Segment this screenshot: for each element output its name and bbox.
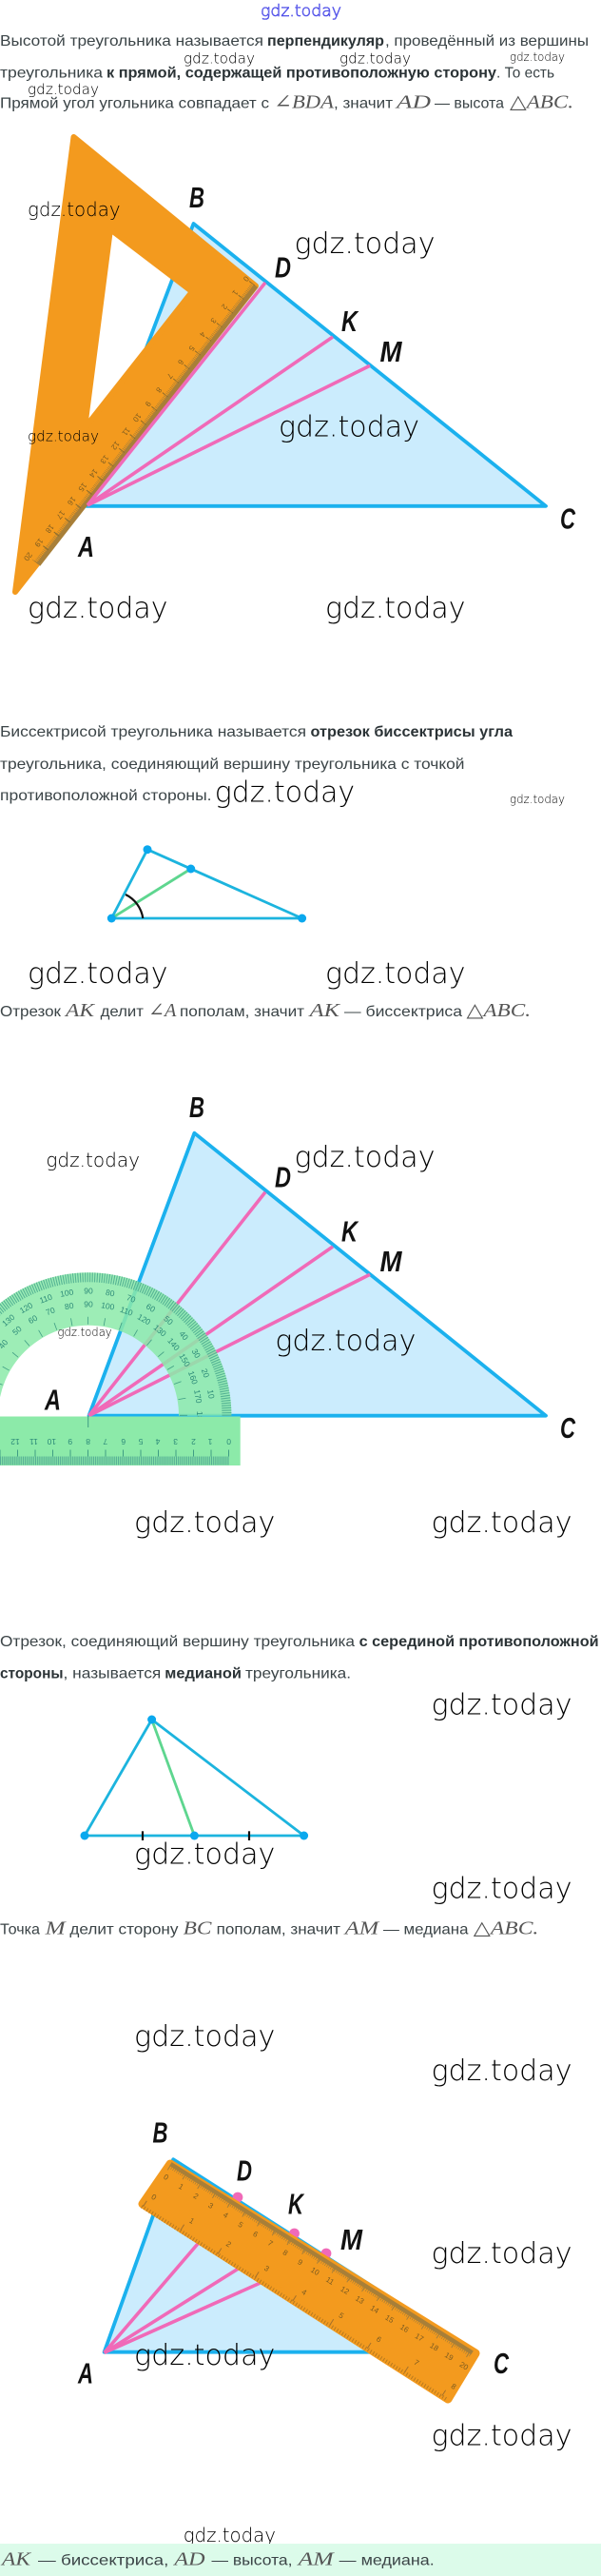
set square numbers: 6 — [176, 358, 185, 366]
set square numbers: 16 — [66, 495, 78, 507]
set square numbers: 1 — [230, 288, 240, 298]
protractor numbers: 40 — [177, 1329, 190, 1343]
ruler inch numbers — [149, 2193, 458, 2391]
set square ruler scale — [35, 283, 256, 564]
text block: median definition: стороны — [0, 1665, 63, 1681]
set square numbers: 3 — [208, 316, 218, 325]
protractor numbers: 110 — [38, 1291, 54, 1306]
watermark: gdz.today — [432, 1872, 572, 1905]
ruler inch numbers: 1 — [187, 2216, 196, 2226]
ruler centimetre numbers: 1 — [177, 2182, 185, 2192]
diagram: triangle with set square — [15, 137, 575, 592]
base ruler numbers: 1 — [207, 1437, 212, 1446]
watermark: gdz.today — [510, 50, 565, 64]
ruler inch numbers: 5 — [338, 2311, 346, 2321]
protractor numbers: 120 — [18, 1300, 34, 1315]
vertex labels: K — [288, 2187, 305, 2221]
watermark: gdz.today — [28, 592, 167, 625]
watermark: gdz.today — [432, 1689, 572, 1722]
protractor numbers: 100 — [100, 1300, 115, 1312]
protractor numbers: 70 — [126, 1292, 137, 1305]
watermark: gdz.today — [432, 2420, 572, 2453]
protractor numbers: 110 — [119, 1305, 134, 1318]
text block: median definition: Отрезок, соединяющий вершину треугольника — [0, 1634, 355, 1650]
ruler centimetre numbers: 11 — [324, 2275, 336, 2287]
ruler inch numbers: 8 — [450, 2382, 458, 2391]
vertex labels: B — [152, 2116, 167, 2149]
base ruler numbers: 5 — [138, 1437, 143, 1446]
vertex labels: C — [560, 502, 575, 535]
vertex labels: C — [560, 1411, 575, 1445]
text block: altitude definition: — высота — [435, 95, 504, 111]
bisector — [111, 869, 191, 918]
protractor numbers — [0, 1287, 217, 1425]
watermark: gdz.today — [295, 227, 436, 261]
watermark: gdz.today — [325, 592, 466, 625]
text block: median definition: медианой — [165, 1665, 242, 1681]
text block: AK is bisector — [0, 1000, 531, 1021]
vertex labels: C — [494, 2347, 509, 2380]
protractor numbers: 100 — [59, 1287, 74, 1299]
triangle sides — [111, 850, 302, 918]
watermark: gdz.today — [184, 50, 255, 68]
text block: median definition: треугольника. — [245, 1665, 351, 1681]
text block: bisector definition: отрезок биссектрисы угла — [310, 724, 513, 740]
base ruler numbers: 12 — [10, 1437, 20, 1446]
base ruler numbers — [10, 1437, 231, 1446]
text block: altitude definition: △ABC. — [510, 91, 573, 112]
vertex labels — [77, 2116, 509, 2390]
set square numbers: 19 — [32, 537, 45, 549]
ruler inch numbers: 7 — [413, 2358, 421, 2368]
set square numbers: 17 — [54, 509, 67, 521]
base ruler numbers: 3 — [173, 1437, 178, 1446]
vertex labels: K — [341, 305, 359, 338]
watermark: gdz.today — [279, 411, 419, 444]
set square numbers — [22, 274, 251, 562]
ruler centimetre numbers: 15 — [383, 2313, 396, 2325]
protractor numbers: 170 — [192, 1389, 204, 1404]
set square numbers: 5 — [186, 344, 196, 353]
watermark: gdz.today — [134, 1506, 275, 1540]
text block: AK is bisector: Отрезок — [0, 1004, 62, 1020]
ruler centimetre numbers: 10 — [309, 2266, 321, 2277]
protractor numbers: 80 — [64, 1301, 74, 1311]
watermark: gdz.today — [28, 428, 99, 445]
set square numbers: 4 — [198, 330, 207, 339]
conclusion text: AM — [296, 2548, 335, 2569]
protractor numbers: 70 — [45, 1305, 56, 1317]
text block: altitude definition: треугольника — [0, 66, 103, 82]
text block: altitude definition: ∠BDA — [274, 91, 335, 112]
set square numbers: 9 — [143, 400, 152, 408]
ruler centimetre numbers: 20 — [458, 2360, 470, 2372]
protractor numbers: 20 — [200, 1367, 212, 1379]
ruler centimetre numbers: 7 — [266, 2238, 275, 2249]
pink points D, K, M — [233, 2193, 331, 2258]
protractor numbers: 30 — [190, 1347, 203, 1360]
text block: AM is median: △ABC. — [474, 1918, 538, 1939]
set square numbers: 7 — [165, 372, 174, 381]
text block: AK is bisector: — биссектриса — [344, 1004, 462, 1020]
conclusion text: — медиана. — [339, 2552, 435, 2568]
text block: bisector definition: Биссектрисой треугольника называется — [0, 724, 306, 740]
pink segments AD, AK, AM — [89, 1192, 370, 1416]
base ruler numbers: 6 — [121, 1437, 126, 1446]
text block: altitude definition: к прямой, содержащей противоположную сторону — [107, 66, 496, 82]
conclusion text: — высота, — [211, 2552, 293, 2568]
vertex labels: B — [189, 181, 204, 214]
conclusion text: AK — [0, 2548, 32, 2569]
ruler inch numbers: 6 — [375, 2334, 383, 2345]
ruler inch numbers: 3 — [262, 2264, 271, 2273]
vertices — [107, 845, 306, 923]
text block: AK is bisector: ∠A — [148, 1000, 177, 1021]
watermark: gdz.today — [134, 2339, 275, 2372]
vertex labels — [77, 181, 575, 563]
protractor numbers: 140 — [165, 1336, 182, 1352]
set square numbers: 2 — [220, 303, 229, 311]
ruler centimetre numbers: 12 — [339, 2285, 351, 2296]
watermark: gdz.today — [28, 957, 167, 991]
ruler centimetre numbers: 9 — [296, 2257, 304, 2268]
protractor numbers: 90 — [84, 1287, 93, 1296]
triangle ABC — [87, 224, 546, 506]
text block: AM is median: AM — [342, 1918, 380, 1939]
ruler centimetre numbers: 0 — [162, 2173, 170, 2182]
conclusion text: — биссектриса, — [38, 2552, 168, 2568]
ruler centimetre numbers: 14 — [369, 2304, 380, 2315]
text block: median definition: с серединой противоположной — [359, 1634, 599, 1650]
protractor numbers: 150 — [177, 1352, 192, 1368]
text block: altitude definition: , проведённый из вершины — [385, 33, 589, 49]
set square numbers: 8 — [154, 385, 164, 395]
watermark: gdz.today — [184, 2524, 276, 2547]
equal-segment ticks — [143, 1831, 249, 1840]
median — [152, 1720, 194, 1836]
ruler centimetre numbers: 6 — [251, 2230, 260, 2239]
set square numbers: 18 — [44, 522, 56, 535]
text block: AK is bisector: △ABC. — [466, 1000, 531, 1021]
text block: AM is median — [0, 1918, 538, 1939]
vertex labels: D — [275, 1161, 291, 1193]
watermark: gdz.today — [28, 81, 99, 98]
vertex labels: A — [77, 530, 94, 563]
diagram: triangle with bisector — [107, 845, 306, 923]
vertex labels: A — [77, 2356, 93, 2390]
base ruler numbers: 10 — [47, 1437, 56, 1446]
watermark: gdz.today — [57, 1326, 112, 1339]
text block: altitude definition: . То есть — [496, 66, 554, 82]
ruler centimetre numbers: 4 — [222, 2211, 230, 2220]
ruler centimetre numbers: 13 — [354, 2294, 366, 2306]
vertex labels: M — [380, 1245, 403, 1278]
ruler inch numbers: 0 — [149, 2193, 158, 2202]
text block: AK is bisector: пополам, значит — [180, 1004, 305, 1020]
base ruler numbers: 11 — [29, 1437, 38, 1446]
ruler centimetre numbers: 5 — [237, 2220, 245, 2230]
watermark: gdz.today — [134, 1838, 275, 1871]
diagram: triangle with protractor — [0, 1091, 575, 1465]
text block: AK is bisector: AK — [307, 1000, 341, 1021]
base ruler ticks — [0, 1416, 229, 1461]
protractor numbers: 50 — [10, 1324, 24, 1337]
ruler centimetre numbers: 8 — [281, 2248, 290, 2258]
base ruler numbers: 9 — [68, 1437, 72, 1446]
base ruler numbers: 2 — [191, 1437, 196, 1446]
watermark: gdz.today — [275, 1325, 416, 1358]
text block: altitude definition — [0, 33, 589, 112]
vertex labels: K — [341, 1214, 359, 1249]
conclusion text — [0, 2548, 435, 2569]
protractor numbers: 120 — [136, 1312, 152, 1327]
vertex labels: D — [237, 2154, 252, 2187]
protractor numbers: 50 — [162, 1314, 175, 1327]
set square numbers: 11 — [120, 425, 132, 438]
text block: bisector definition — [0, 724, 513, 804]
diagram: triangle with ruler — [77, 2116, 509, 2399]
ruler centimetre numbers: 19 — [443, 2350, 456, 2363]
triangle ABC — [89, 1133, 546, 1416]
watermark: gdz.today — [325, 957, 466, 991]
conclusion band — [0, 2544, 601, 2576]
set square — [15, 137, 256, 592]
vertex labels: A — [44, 1384, 61, 1416]
base ruler numbers: 8 — [86, 1437, 90, 1446]
base ruler numbers: 7 — [103, 1437, 107, 1446]
text block: AM is median: — медиана — [383, 1922, 469, 1938]
band background — [0, 2544, 601, 2576]
set square numbers: 10 — [130, 412, 143, 424]
text block: altitude definition: Высотой треугольника называется — [0, 33, 263, 49]
text block: AM is median: BC — [184, 1918, 212, 1939]
text block: bisector definition: треугольника, соединяющий вершину треугольника с точкой — [0, 757, 465, 773]
text block: AM is median: делит сторону — [69, 1922, 178, 1938]
watermark: gdz.today — [46, 1149, 140, 1171]
vertex labels — [44, 1091, 575, 1445]
base ruler numbers: 4 — [155, 1437, 160, 1446]
protractor numbers: 60 — [145, 1302, 157, 1314]
text block: AM is median: пополам, значит — [217, 1922, 341, 1938]
vertex labels: M — [340, 2223, 363, 2256]
watermark: top blue: gdz.today — [261, 2, 341, 21]
protractor numbers: 60 — [27, 1313, 39, 1326]
ruler centimetre numbers: 17 — [414, 2331, 425, 2344]
protractor numbers: 180 — [195, 1411, 204, 1425]
protractor numbers: 90 — [84, 1300, 93, 1309]
vertex labels: D — [275, 251, 291, 284]
watermark: gdz.today — [28, 198, 121, 221]
pink segments AD, AK, AM — [105, 2197, 326, 2352]
text block: altitude definition: Прямой угол угольника совпадает с — [0, 95, 269, 111]
angle arcs — [126, 895, 143, 918]
protractor numbers: 80 — [105, 1288, 116, 1298]
protractor numbers: 130 — [0, 1312, 17, 1328]
base ruler numbers: 0 — [226, 1437, 231, 1446]
ruler centimetre numbers: 16 — [398, 2323, 411, 2334]
pink segment AD — [87, 283, 265, 505]
protractor numbers: 130 — [152, 1323, 168, 1339]
protractor arc — [0, 1272, 231, 1416]
text block: median definition — [0, 1634, 599, 1681]
vertices — [80, 1715, 308, 1840]
set square numbers: 12 — [109, 440, 121, 452]
conclusion text: AD — [172, 2548, 205, 2569]
text block: AM is median: M — [44, 1918, 67, 1939]
set square numbers: 20 — [22, 550, 34, 562]
text block: altitude definition: , значит — [334, 95, 394, 111]
vertex labels: M — [380, 335, 403, 368]
set square numbers: 13 — [98, 453, 110, 465]
set square numbers: 15 — [76, 482, 88, 494]
vertex labels: B — [189, 1091, 204, 1124]
diagram: triangle with median — [80, 1715, 308, 1840]
ruler inch numbers: 4 — [300, 2288, 308, 2297]
ruler body — [143, 2164, 475, 2399]
watermark: gdz.today — [215, 777, 355, 810]
watermark: gdz.today — [295, 1141, 436, 1174]
triangle sides — [85, 1720, 304, 1836]
set square numbers: 0 — [242, 274, 251, 284]
ruler centimetre numbers: 18 — [428, 2341, 440, 2353]
watermark: gdz.today — [432, 2055, 572, 2088]
watermark: gdz.today — [510, 793, 565, 806]
text block: AM is median: Точка — [0, 1922, 40, 1938]
ruler scales — [142, 2164, 473, 2399]
set square numbers: 14 — [87, 467, 99, 480]
watermark: gdz.today — [432, 2237, 572, 2271]
protractor numbers: 160 — [186, 1369, 200, 1386]
text block: altitude definition: AD — [394, 91, 432, 112]
watermark: gdz.today — [339, 50, 411, 68]
text block: AK is bisector: AK — [64, 1000, 96, 1021]
text block: AK is bisector: делит — [101, 1004, 145, 1020]
watermark: gdz.today — [134, 2020, 275, 2054]
ruler centimetre numbers: 2 — [192, 2192, 201, 2201]
triangle ABC — [105, 2159, 475, 2352]
text block: median definition: , называется — [63, 1665, 161, 1681]
ruler inch numbers: 2 — [224, 2239, 233, 2250]
watermark: gdz.today — [432, 1506, 572, 1540]
protractor numbers: 10 — [205, 1388, 217, 1400]
text block: bisector definition: противоположной стороны. — [0, 788, 211, 804]
protractor degree ticks — [0, 1277, 226, 1416]
pink segments AK, AM — [87, 337, 370, 505]
ruler centimetre numbers — [162, 2173, 470, 2372]
text block: altitude definition: перпендикуляр — [267, 33, 384, 49]
ruler centimetre numbers: 3 — [206, 2201, 215, 2211]
protractor base ruler — [0, 1416, 241, 1465]
